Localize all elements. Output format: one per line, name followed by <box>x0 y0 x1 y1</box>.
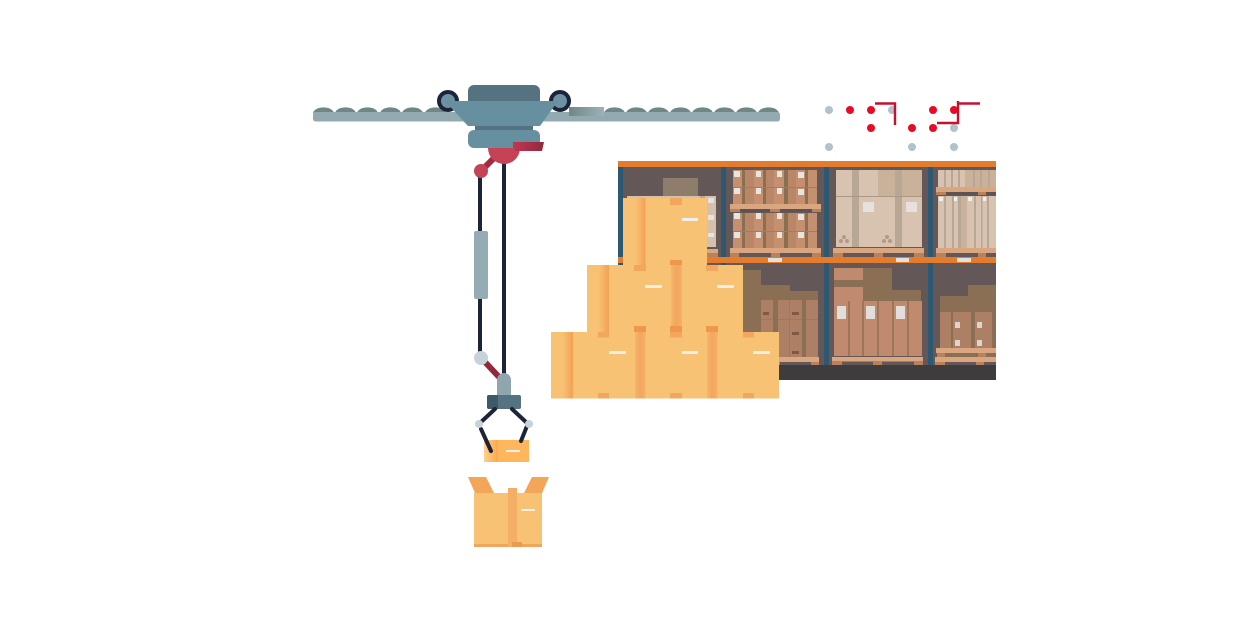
bay 4 upper pallets <box>936 170 996 257</box>
lower joint <box>474 351 500 378</box>
bay 4 lower pallets <box>935 285 996 365</box>
bay 2 lower pallet <box>726 270 819 365</box>
trolley body <box>445 85 558 148</box>
cables <box>478 150 506 385</box>
dot matrix pattern <box>825 101 980 151</box>
open box <box>468 477 549 547</box>
red joint arm <box>474 132 520 178</box>
icon: recycling mark <box>839 235 892 243</box>
small box held by gripper <box>484 440 529 462</box>
bay 1 upper pallet <box>626 178 718 257</box>
wheels <box>439 92 569 110</box>
overhead rail <box>313 107 780 122</box>
bay 3 lower pallet <box>832 268 923 365</box>
middle row of boxes <box>587 260 743 332</box>
stacked cardboard boxes <box>551 198 779 398</box>
hydraulic cylinder <box>474 231 488 299</box>
red visor <box>513 142 544 151</box>
bay 3 upper pallet <box>833 170 924 257</box>
gripper claw <box>475 373 533 451</box>
bay 2 upper pallets <box>730 170 821 257</box>
panel: warehouse rack <box>618 161 996 380</box>
crane hoist <box>439 85 569 385</box>
bottom row of boxes <box>551 332 779 398</box>
red circuit lines <box>875 101 980 125</box>
rack beams <box>618 161 996 263</box>
rack posts <box>618 167 933 365</box>
top box <box>623 198 707 265</box>
